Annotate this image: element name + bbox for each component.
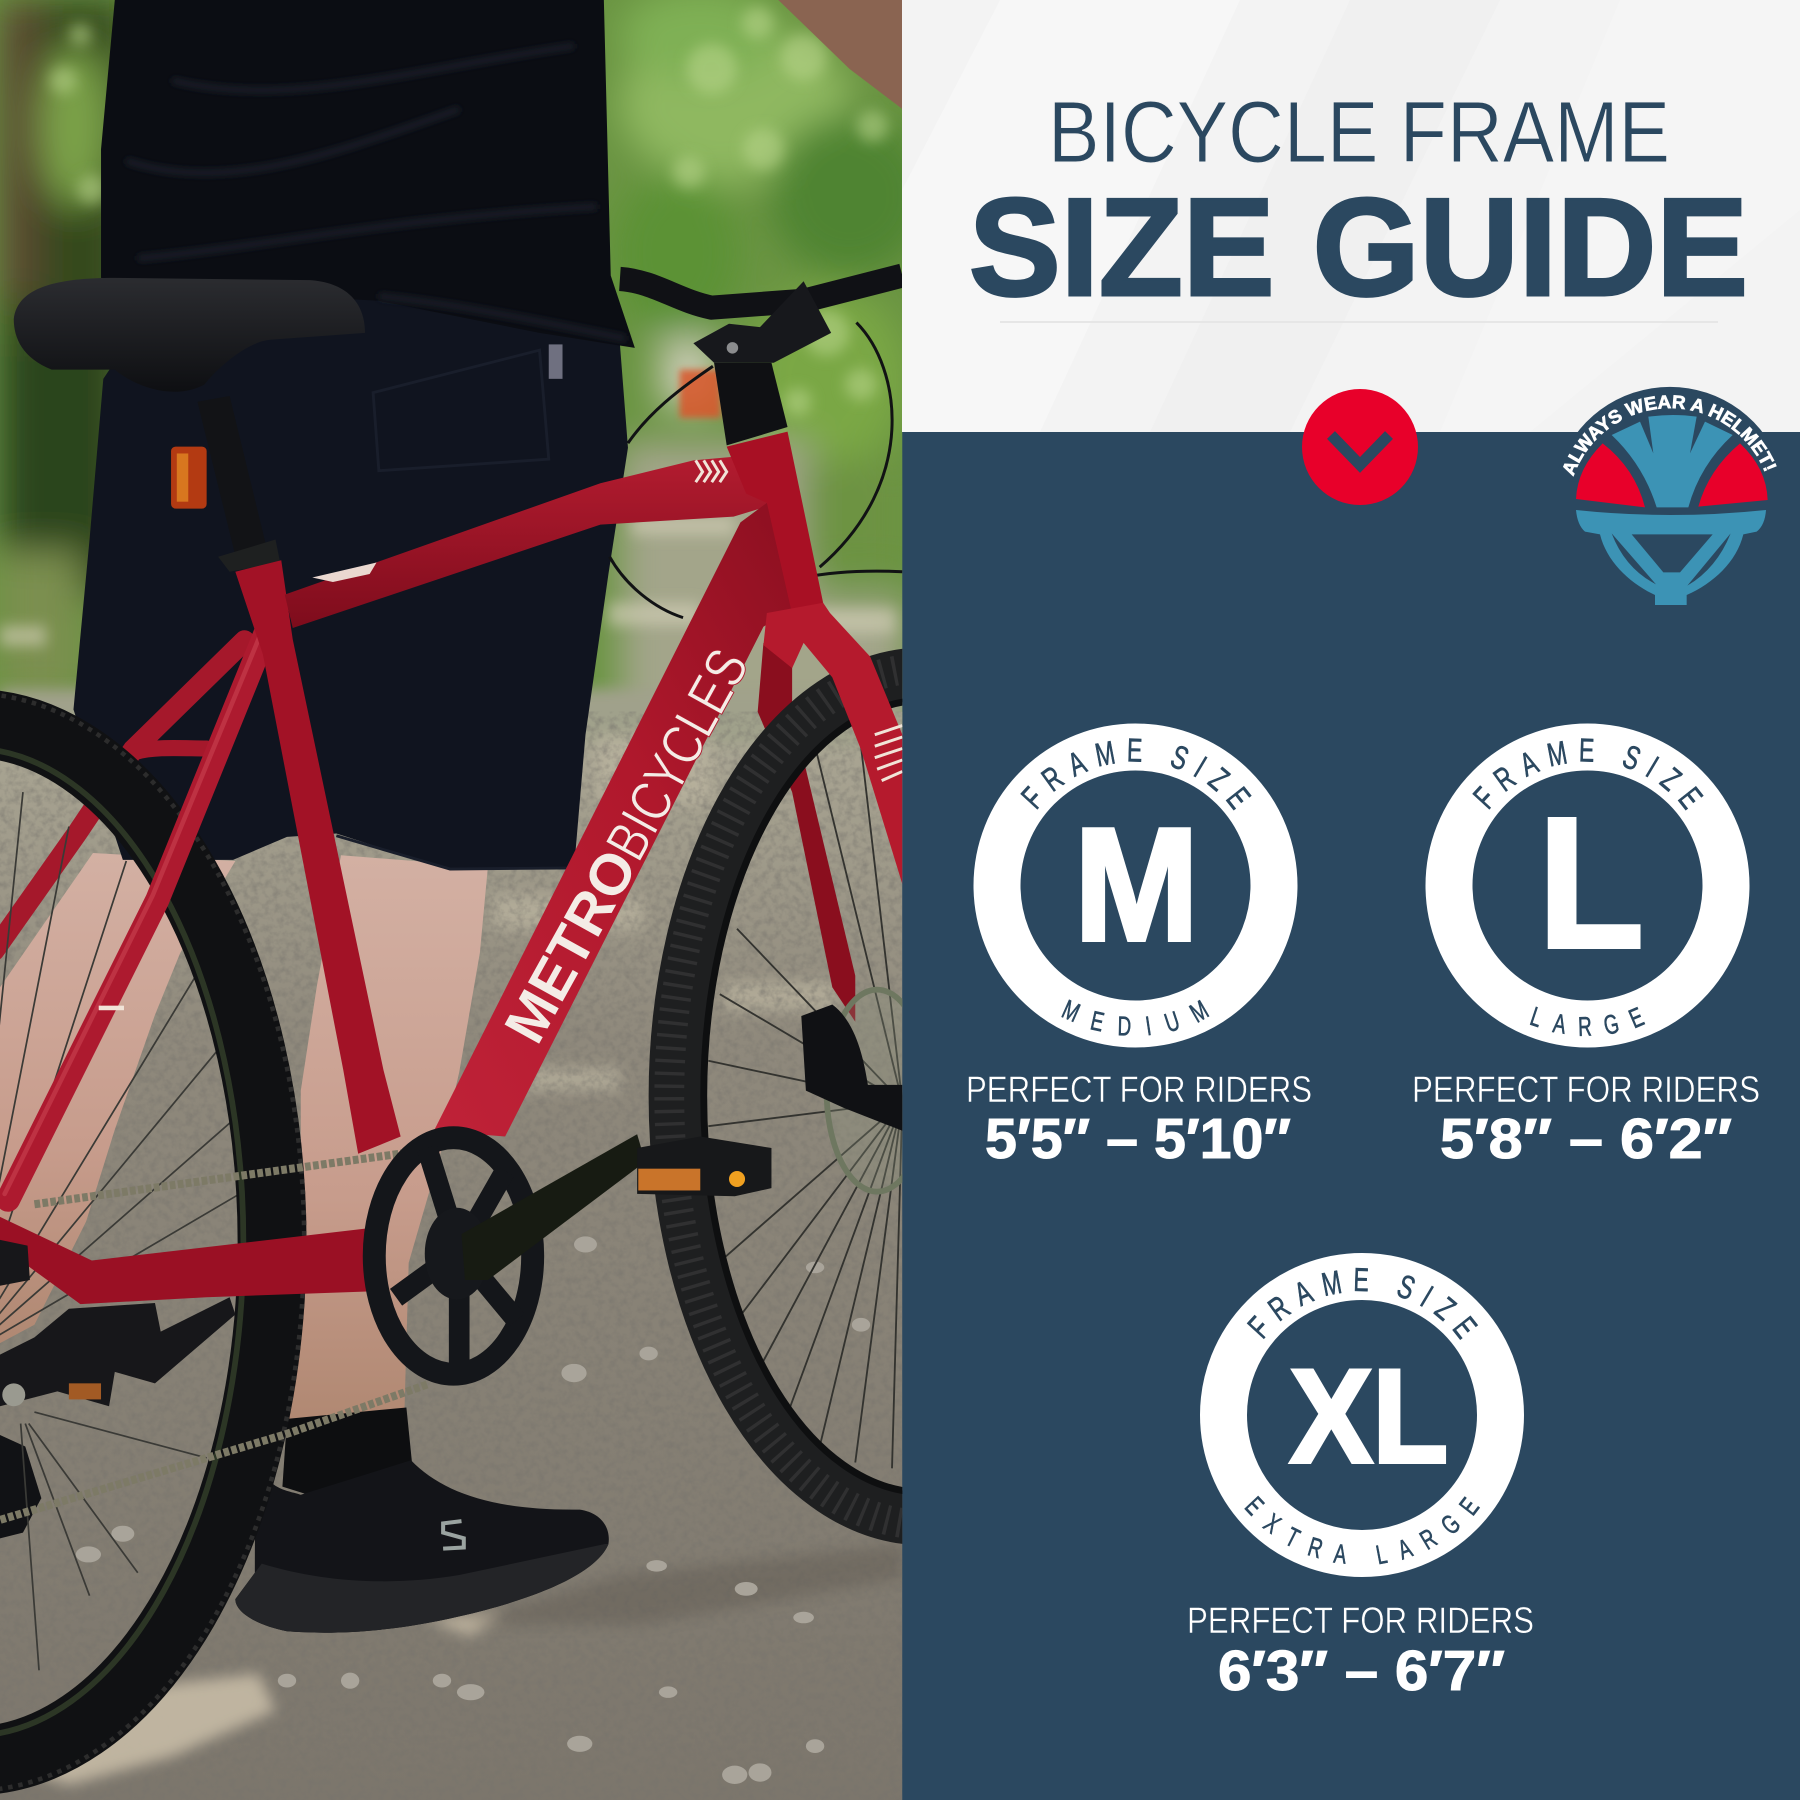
seat post xyxy=(171,396,280,572)
helmet slogan: ALWAYS WEAR A HELMET! xyxy=(1563,395,1777,477)
chain stay xyxy=(0,1217,367,1304)
text: Extra Large rider height: 6′3″ – 6′7″ xyxy=(1218,1639,1505,1703)
rear stay behind wheel xyxy=(0,641,245,951)
rear wheel xyxy=(0,693,304,1791)
panel: photo of rider with red bicycle xyxy=(0,0,902,1800)
seat tube xyxy=(235,560,401,1154)
text: Large rider height: 5′8″ – 6′2″ xyxy=(1440,1107,1732,1171)
front seat stay xyxy=(5,631,266,1200)
brand text: METROBICYCLES: BICYCLES xyxy=(594,639,761,871)
pedal and reflector xyxy=(637,1137,771,1196)
head tube xyxy=(727,432,823,614)
text: Medium rider height: 5′5″ – 5′10″ xyxy=(985,1107,1291,1171)
brand text: METROBICYCLES xyxy=(504,650,746,1044)
front fork inner leg xyxy=(758,643,855,1022)
crank arm xyxy=(461,1134,645,1280)
panel: light header xyxy=(902,0,1800,432)
helmet shell xyxy=(1612,415,1733,507)
helmet red right xyxy=(1698,443,1768,507)
badge: Extra Large frame xyxy=(1200,1253,1524,1577)
rear derailleur and pedal xyxy=(0,1240,235,1406)
rider shoes and socks xyxy=(0,1407,609,1633)
text: Extra Large rider height xyxy=(1187,1600,1534,1703)
badge: Large frame: LARGE xyxy=(1530,1006,1646,1036)
text: Extra Large rider height: PERFECT FOR RIDERS xyxy=(1187,1600,1534,1641)
chain xyxy=(0,1150,427,1520)
rider arm xyxy=(778,0,902,109)
bicycle red frame xyxy=(0,432,902,1304)
rider navy shorts xyxy=(73,276,628,870)
text: Medium rider height: PERFECT FOR RIDERS xyxy=(966,1069,1312,1110)
photo background: gravel path xyxy=(0,689,902,1800)
frame decals xyxy=(696,460,902,781)
photo background: blurred foliage xyxy=(0,0,930,740)
badge: Extra Large frame: XL xyxy=(1290,1343,1448,1491)
badge: Extra Large frame: EXTRA LARGE xyxy=(1244,1496,1480,1564)
text: Large rider height xyxy=(1412,1069,1760,1171)
badge: Medium frame: MEDIUM xyxy=(1061,999,1210,1036)
badge: Large frame xyxy=(1426,724,1750,1048)
brand text: METROBICYCLES: METRO xyxy=(493,840,650,1053)
badge: Extra Large frame: FRAME SIZE xyxy=(1246,1268,1478,1340)
text: Medium rider height xyxy=(966,1069,1312,1171)
chainring xyxy=(374,1138,533,1374)
down tube xyxy=(434,503,809,1137)
fork crown and outer leg xyxy=(763,603,902,884)
legs xyxy=(0,853,488,1424)
helmet badge arch xyxy=(1558,387,1782,482)
title line: BICYCLE FRAME: BICYCLE FRAME xyxy=(1048,84,1670,181)
title line: SIZE GUIDE: SIZE GUIDE xyxy=(969,170,1748,325)
helmet lower strap xyxy=(1576,510,1766,605)
top tube xyxy=(285,453,771,628)
helmet red left xyxy=(1576,443,1645,507)
badge: Medium frame: M xyxy=(1074,795,1199,975)
badge: Large frame: FRAME SIZE xyxy=(1472,738,1704,810)
panel: navy background xyxy=(902,432,1800,1800)
handlebar and stem xyxy=(610,276,902,618)
icon: red circle with chevron xyxy=(1302,389,1418,505)
badge: Medium frame: FRAME SIZE xyxy=(1020,738,1252,810)
icon: helmet badge xyxy=(1563,386,1777,605)
badge: Medium frame xyxy=(974,724,1298,1048)
saddle xyxy=(14,278,365,392)
front wheel xyxy=(648,648,902,1544)
badge: Large frame: L xyxy=(1538,780,1644,987)
rider black shirt xyxy=(101,0,635,348)
